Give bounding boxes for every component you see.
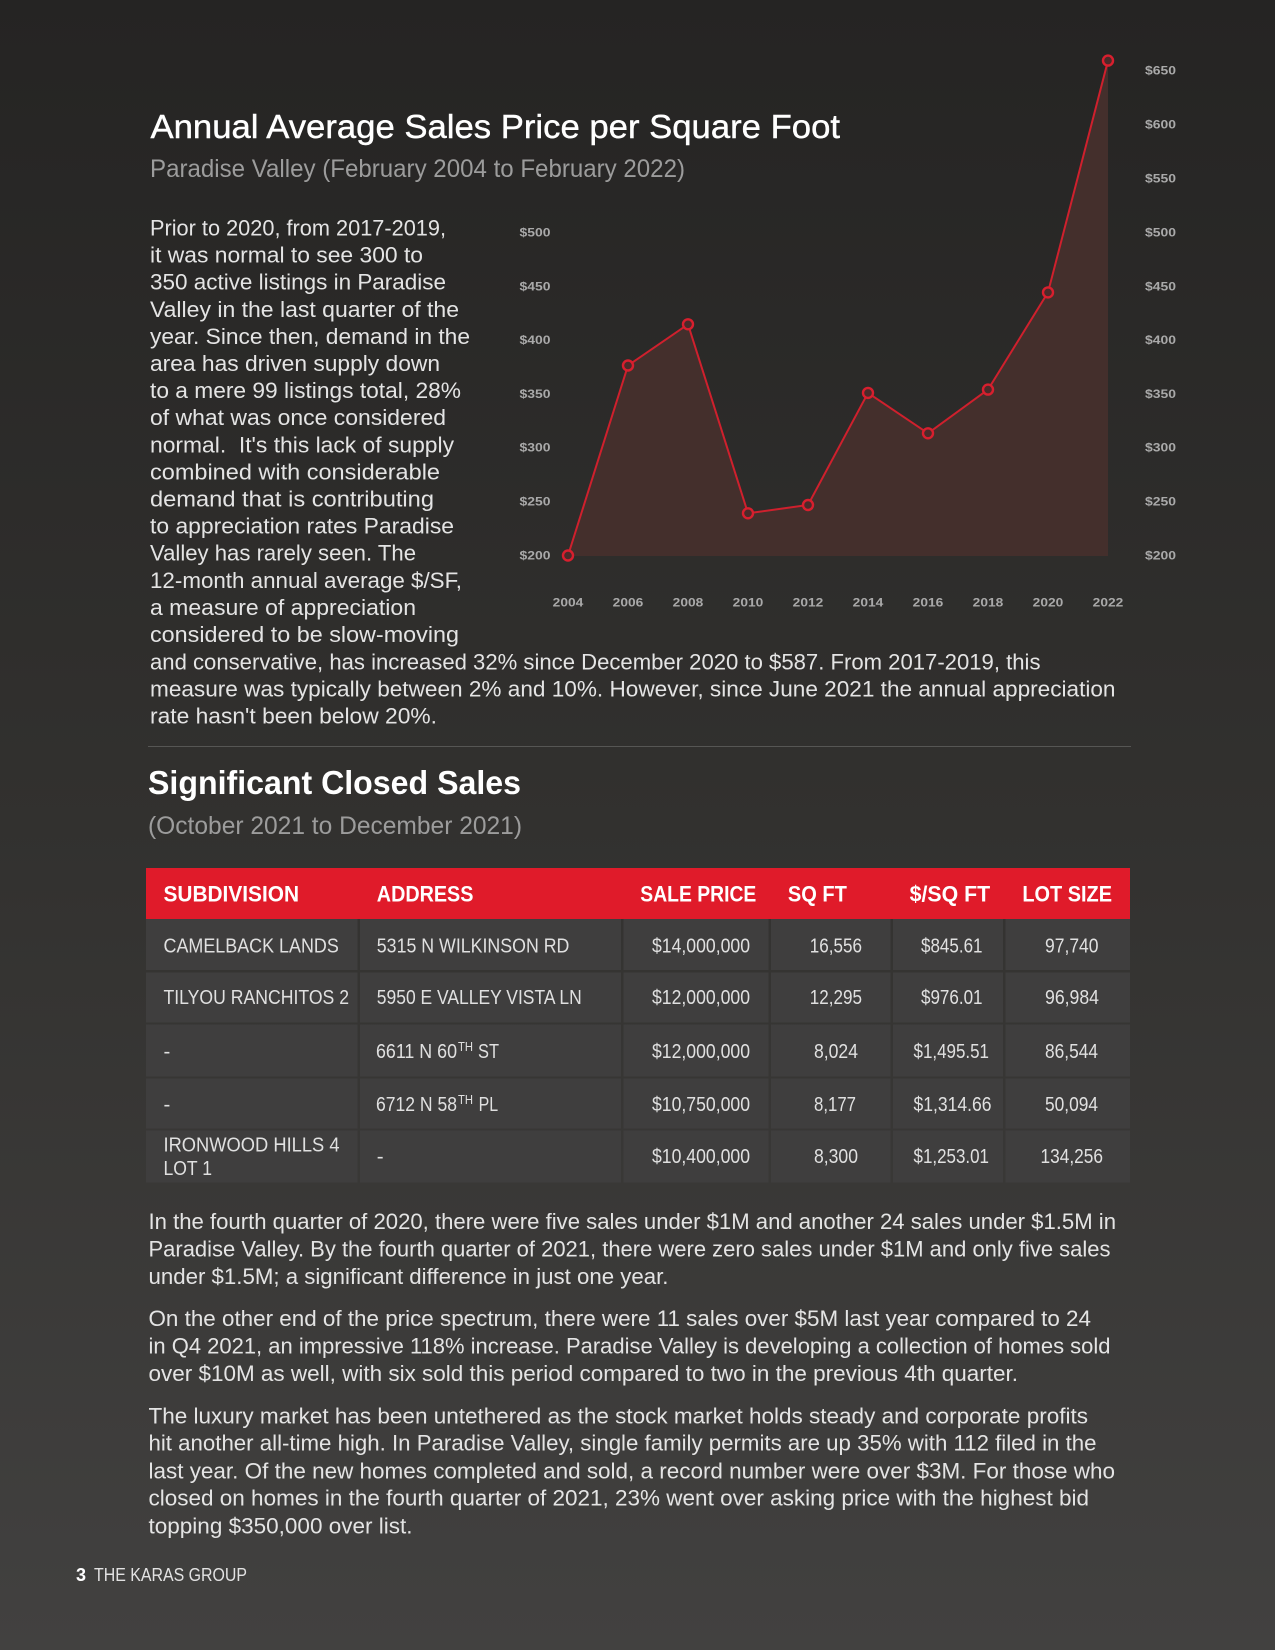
text block: market commentary: Prior to 2020, from 2017-2019,: [150, 216, 446, 240]
table row: 6712 n 58th pl: 8,177: [814, 1093, 856, 1116]
table row: camelback lands: 5315 N WILKINSON RD: [377, 935, 569, 958]
table header row: [146, 868, 1130, 919]
table row: 6712 n 58th pl: 6712 N 58: [376, 1093, 457, 1116]
right axis labels: $600: [1145, 118, 1176, 132]
text block: fourth quarter sales: under $1.5M; a significant difference in just one year.: [148, 1264, 668, 1289]
x axis year labels: 2016: [913, 596, 944, 610]
text block: luxury market: The luxury market has been untethered as the stock market holds steady and corporate profits: [148, 1403, 1088, 1428]
table row: camelback lands: CAMELBACK LANDS: [164, 935, 339, 958]
text block: market commentary: Valley has rarely seen. The: [150, 541, 416, 566]
table row: 6712 n 58th pl: -: [164, 1093, 170, 1116]
table row: 6611 n 60th st: -: [164, 1040, 170, 1063]
text block: fourth quarter sales: [148, 1209, 1116, 1289]
left axis labels: $400: [520, 333, 551, 347]
table header row: ADDRESS: [377, 882, 473, 907]
table row: 6611 n 60th st: $1,495.51: [914, 1040, 989, 1063]
left axis labels: $350: [520, 387, 551, 401]
table header row: SUBDIVISION: [164, 882, 299, 907]
text block: market commentary: year. Since then, demand in the: [150, 324, 470, 349]
text block: market commentary: 12-month annual average $/SF,: [150, 568, 462, 593]
text block: high end sales: in Q4 2021, an impressive 118% increase. Paradise Valley is developing a collection of homes sold: [148, 1334, 1110, 1358]
right axis labels: $500: [1145, 226, 1176, 240]
left axis labels: [520, 226, 551, 562]
left axis labels: $450: [520, 280, 551, 294]
table row: 6611 n 60th st: TH: [458, 1039, 473, 1054]
table row: camelback lands: $845.61: [921, 935, 982, 958]
left axis labels: $200: [520, 548, 551, 562]
right axis labels: $350: [1145, 387, 1176, 401]
text block: market commentary: 350 active listings in Paradise: [150, 270, 446, 295]
x axis year labels: 2010: [733, 596, 764, 610]
subheading: paradise valley date range: Paradise Valley (February 2004 to February 2022): [150, 155, 685, 183]
text block: market commentary: of what was once considered: [150, 405, 446, 430]
text block: market commentary: to a mere 99 listings total, 28%: [150, 378, 461, 403]
x axis year labels: 2018: [973, 596, 1004, 610]
x axis year labels: 2012: [793, 596, 824, 610]
table row: tilyou ranchitos 2: TILYOU RANCHITOS 2: [164, 986, 349, 1009]
table row: tilyou ranchitos 2: 12,295: [810, 986, 862, 1009]
table row: 6712 n 58th pl: 50,094: [1045, 1093, 1098, 1116]
table row: ironwood hills 4 lot 1: $10,400,000: [652, 1145, 750, 1168]
table row: ironwood hills 4 lot 1: LOT 1: [164, 1157, 212, 1180]
text block: market commentary: considered to be slow-moving: [150, 622, 459, 647]
text block: market commentary: to appreciation rates Paradise: [150, 514, 454, 539]
text block: market commentary: normal. It's this lack of supply: [150, 432, 455, 457]
right axis labels: $550: [1145, 172, 1176, 186]
left axis labels: $500: [520, 226, 551, 240]
right axis labels: $200: [1145, 548, 1176, 562]
x axis year labels: [553, 596, 1124, 610]
x axis year labels: 2020: [1033, 596, 1064, 610]
text block: luxury market: topping $350,000 over list.: [148, 1513, 412, 1538]
x axis year labels: 2022: [1093, 596, 1124, 610]
text block: market commentary: a measure of appreciation: [150, 595, 416, 620]
table row: 6712 n 58th pl: PL: [479, 1093, 498, 1116]
table row: tilyou ranchitos 2: [146, 972, 1130, 1022]
table row: tilyou ranchitos 2: $12,000,000: [652, 986, 750, 1009]
table row: camelback lands: $14,000,000: [652, 935, 750, 958]
table row: ironwood hills 4 lot 1: 134,256: [1040, 1145, 1103, 1168]
text block: luxury market: hit another all-time high. In Paradise Valley, single family permits are up 35% with 112 filed in the: [148, 1431, 1096, 1456]
table row: ironwood hills 4 lot 1: IRONWOOD HILLS 4: [164, 1134, 340, 1157]
subheading: closed sales date range: (October 2021 to December 2021): [148, 812, 522, 840]
table row: tilyou ranchitos 2: 5950 E VALLEY VISTA LN: [377, 986, 582, 1009]
chart line: [568, 61, 1108, 555]
table row: ironwood hills 4 lot 1: $1,253.01: [914, 1145, 989, 1168]
table header row: SALE PRICE: [640, 882, 756, 907]
table row: camelback lands: 97,740: [1045, 935, 1098, 958]
table row: 6712 n 58th pl: $1,314.66: [914, 1093, 992, 1116]
table row: 6611 n 60th st: 86,544: [1045, 1040, 1098, 1063]
table row: ironwood hills 4 lot 1: -: [377, 1145, 384, 1168]
text block: market commentary: area has driven supply down: [150, 351, 440, 376]
text block: market commentary: measure was typically between 2% and 10%. However, since June 2021 the annual appreciation: [150, 676, 1116, 701]
right axis labels: [1145, 64, 1176, 562]
right axis labels: $450: [1145, 280, 1176, 294]
footer: page number and group name: THE KARAS GROUP: [94, 1565, 247, 1585]
text block: luxury market: closed on homes in the fourth quarter of 2021, 23% went over asking price with the highest bid: [148, 1486, 1089, 1511]
text block: high end sales: over $10M as well, with six sold this period compared to two in the previous 4th quarter.: [148, 1361, 1018, 1386]
table row: 6712 n 58th pl: $10,750,000: [652, 1093, 750, 1116]
table: significant closed sales: [146, 868, 1130, 1182]
text block: market commentary: rate hasn't been below 20%.: [150, 703, 437, 728]
text block: high end sales: On the other end of the price spectrum, there were 11 sales over $5M last year compared to 24: [148, 1306, 1091, 1331]
footer: page number and group name: 3: [76, 1565, 86, 1585]
heading: annual average sales price: Annual Average Sales Price per Square Foot: [150, 108, 840, 145]
right axis labels: $300: [1145, 440, 1176, 454]
table row: ironwood hills 4 lot 1: 8,300: [814, 1145, 858, 1168]
text block: luxury market: last year. Of the new homes completed and sold, a record number were over $3M. For those who: [148, 1458, 1115, 1483]
right axis labels: $250: [1145, 494, 1176, 508]
x axis year labels: 2014: [853, 596, 884, 610]
x axis year labels: 2006: [613, 596, 644, 610]
chart markers: [563, 56, 1113, 560]
table header row: $/SQ FT: [910, 882, 991, 907]
text block: fourth quarter sales: In the fourth quarter of 2020, there were five sales under $1M and another 24 sales under $1.5M in: [148, 1209, 1116, 1234]
table row: tilyou ranchitos 2: 96,984: [1045, 986, 1099, 1009]
table header row: SQ FT: [788, 882, 847, 907]
table row: 6611 n 60th st: ST: [478, 1040, 499, 1063]
text block: fourth quarter sales: Paradise Valley. By the fourth quarter of 2021, there were zero sales under $1M and only five sales: [148, 1236, 1110, 1261]
table row: 6611 n 60th st: 6611 N 60: [376, 1040, 457, 1063]
text block: market commentary: [150, 216, 1116, 728]
text block: high end sales: [148, 1306, 1110, 1386]
chart area fill: [568, 61, 1108, 556]
right axis labels: $650: [1145, 64, 1176, 78]
chart: price per square foot area chart: [520, 56, 1176, 610]
table row: ironwood hills 4 lot 1: [146, 1130, 1130, 1182]
table header row: LOT SIZE: [1022, 882, 1112, 907]
text block: market commentary: demand that is contributing: [150, 486, 434, 512]
table row: camelback lands: 16,556: [810, 935, 862, 958]
table row: 6611 n 60th st: 8,024: [814, 1040, 858, 1063]
x axis year labels: 2008: [673, 596, 704, 610]
text block: luxury market: [148, 1403, 1115, 1538]
table row: 6611 n 60th st: $12,000,000: [652, 1040, 750, 1063]
text block: market commentary: combined with considerable: [150, 459, 440, 484]
heading: significant closed sales: Significant Closed Sales: [148, 764, 521, 801]
table row: camelback lands: [146, 919, 1130, 970]
table row: tilyou ranchitos 2: $976.01: [921, 986, 982, 1009]
table row: 6712 n 58th pl: [146, 1078, 1130, 1128]
text block: market commentary: it was normal to see 300 to: [150, 243, 423, 268]
left axis labels: $250: [520, 494, 551, 508]
text block: market commentary: and conservative, has increased 32% since December 2020 to $587. From 2017-2019, this: [150, 649, 1040, 674]
left axis labels: $300: [520, 440, 551, 454]
x axis year labels: 2004: [553, 596, 584, 610]
right axis labels: $400: [1145, 333, 1176, 347]
table row: 6712 n 58th pl: TH: [458, 1092, 473, 1107]
table row: 6611 n 60th st: [146, 1024, 1130, 1076]
text block: market commentary: Valley in the last quarter of the: [150, 297, 459, 322]
